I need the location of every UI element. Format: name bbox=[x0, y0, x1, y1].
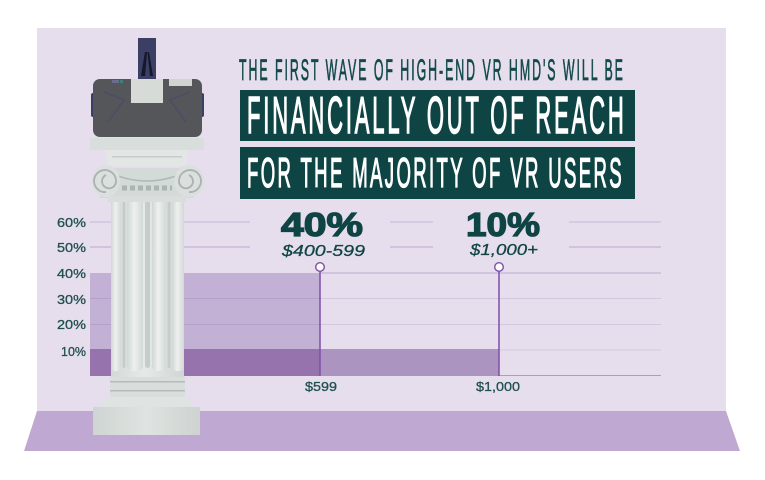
heading line 1: THE FIRST WAVE OF HIGH-END VR HMD'S WILL BE bbox=[239, 53, 623, 87]
callout: 10%: $1,000+ bbox=[469, 242, 538, 259]
bar: 40% to $599 bbox=[90, 273, 320, 376]
heading bbox=[239, 53, 635, 199]
bar chart bbox=[57, 215, 661, 394]
icon: VR headset bbox=[91, 38, 204, 137]
column capital bbox=[90, 138, 204, 202]
y-axis labels: 50% bbox=[57, 240, 86, 255]
callout: 40% bbox=[281, 206, 365, 260]
banner: financially out of reach: FINANCIALLY OUT OF REACH bbox=[247, 87, 624, 145]
callout: 40%: $400-599 bbox=[281, 243, 365, 260]
column base bbox=[93, 377, 200, 435]
y-axis labels: 40% bbox=[57, 266, 86, 281]
banner: for the majority: FOR THE MAJORITY OF VR USERS bbox=[247, 150, 622, 196]
marker: $599 bbox=[316, 263, 324, 376]
icon: ionic column bbox=[90, 38, 204, 435]
y-axis labels: 30% bbox=[57, 292, 86, 307]
floor bbox=[24, 411, 740, 451]
y-axis labels: 60% bbox=[57, 215, 86, 230]
bar: 10% to $1,000 bbox=[320, 349, 499, 376]
y-axis labels: 10% bbox=[61, 344, 86, 359]
x-axis labels bbox=[305, 379, 520, 394]
background wall bbox=[37, 28, 726, 411]
y-axis labels bbox=[57, 215, 86, 359]
callout: 10% bbox=[466, 206, 540, 259]
marker: $1,000 bbox=[495, 263, 503, 376]
callout: 40%: 40% bbox=[281, 206, 363, 243]
column shaft bbox=[111, 190, 184, 378]
x-axis labels: $1,000 bbox=[476, 379, 520, 394]
x-axis labels: $599 bbox=[305, 379, 337, 394]
bar: overlap bbox=[90, 349, 320, 376]
callout: 10%: 10% bbox=[466, 206, 540, 243]
y-axis labels: 20% bbox=[57, 317, 86, 332]
